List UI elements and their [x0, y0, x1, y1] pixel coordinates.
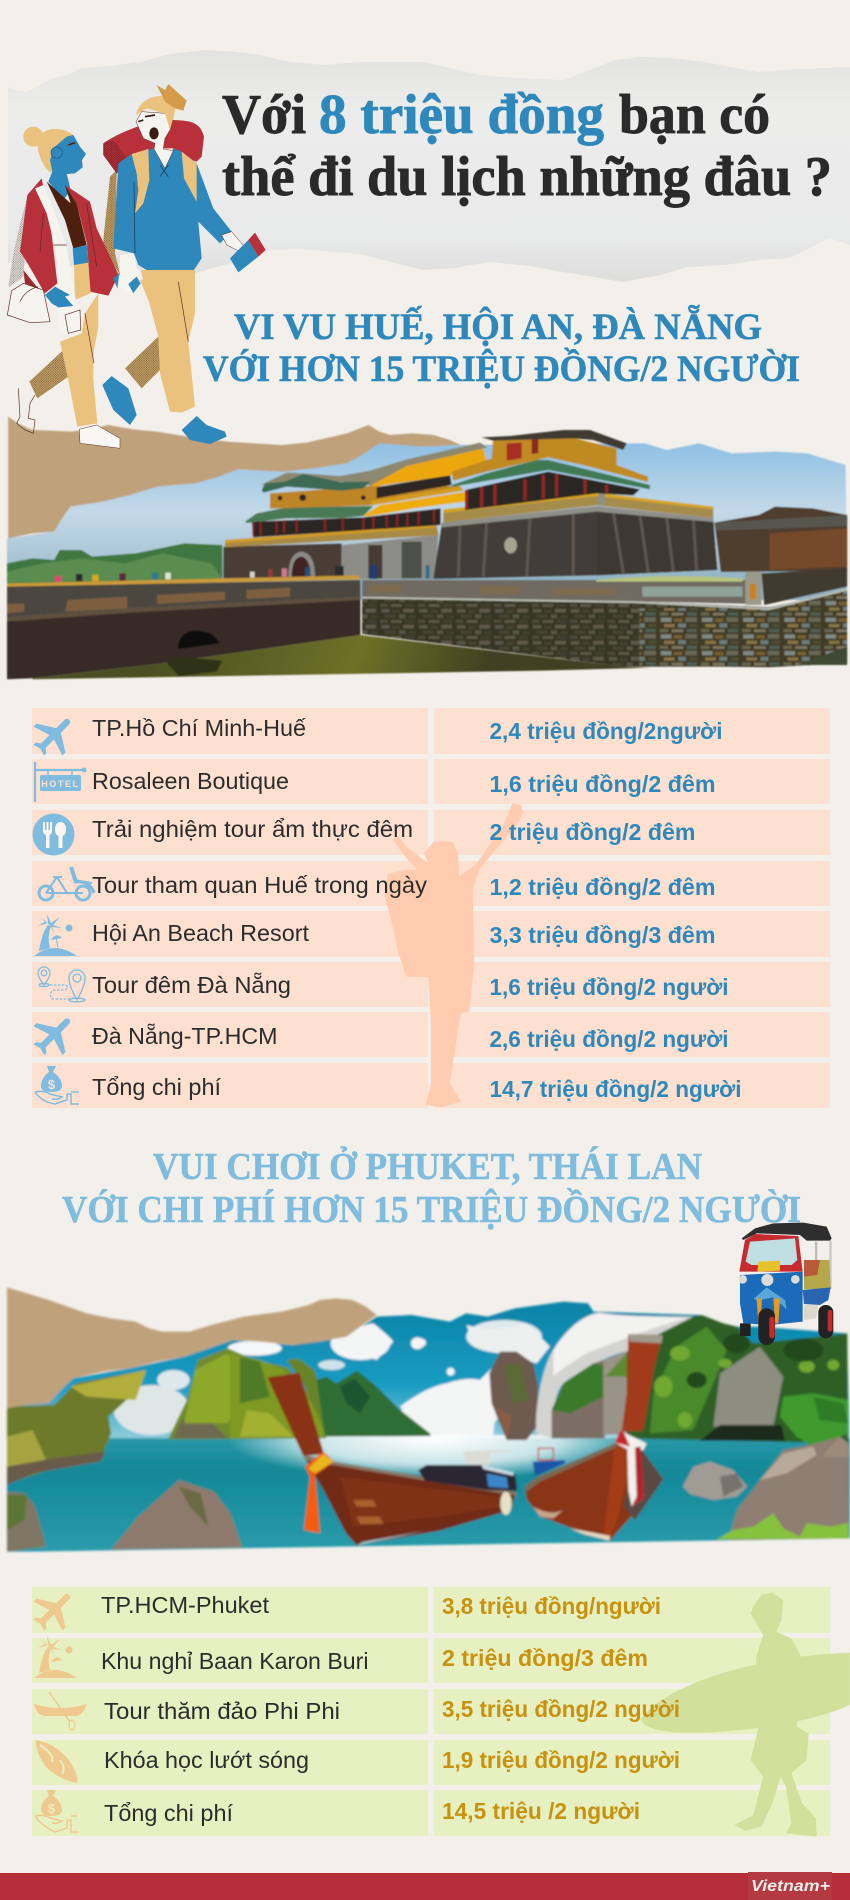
illustration: tuk-tuk [738, 1223, 833, 1345]
left longtail boat [267, 1373, 517, 1545]
row: Ho Chi Minh - Hue [92, 715, 722, 744]
icon: plane [24, 1005, 84, 1064]
title: Với [222, 84, 306, 146]
lower bodies [7, 270, 227, 448]
row: night food tour: 2 triệu đồng/2 đêm [490, 819, 696, 845]
icon: palm island [34, 1636, 77, 1678]
photo: Hue citadel with torn paper [7, 417, 847, 679]
silhouette: hiker with raised arms [385, 803, 523, 1107]
row: Rosaleen Boutique: 1,6 triệu đồng/2 đêm [490, 771, 716, 797]
sub-photo: citadel gate in true scale [223, 430, 717, 579]
icon: money bag in hand: $ [48, 1077, 56, 1092]
icon: money bag in hand [35, 1066, 79, 1104]
logo: Vietnam+: Vietnam+ [751, 1878, 830, 1895]
icon: money bag in hand: $ [48, 1801, 56, 1816]
row: Hoi An Beach Resort [92, 920, 716, 948]
illustration: two travellers [7, 84, 266, 448]
row: Hue day tour [92, 872, 716, 900]
title: 8 triệu đồng [319, 84, 604, 146]
row: total cost: 14,5 triệu /2 người [442, 1798, 640, 1824]
row: Hue day tour: 1,2 triệu đồng/2 đêm [490, 874, 716, 900]
row: HCMC - Phuket: TP.HCM-Phuket [101, 1592, 270, 1618]
row: Da Nang night tour [92, 971, 728, 1000]
row: Phi Phi tour: 3,5 triệu đồng/2 người [442, 1696, 680, 1722]
photo: Phuket bay with longtail boats [7, 1287, 850, 1552]
row: Ho Chi Minh - Hue: TP.Hồ Chí Minh-Huế [92, 715, 306, 741]
row: Da Nang night tour: Tour đêm Đà Nẵng [92, 971, 291, 998]
row: Da Nang - HCMC: Đà Nẵng-TP.HCM [92, 1022, 278, 1049]
row: Rosaleen Boutique: Rosaleen Boutique [92, 768, 289, 794]
row: total cost [92, 1074, 742, 1102]
icon: canoe and paddle [34, 1692, 87, 1730]
title: thể đi du lịch những đâu ? [222, 146, 832, 208]
row: Hue day tour: Tour tham quan Huế trong ngày [92, 872, 428, 898]
row: Baan Karon Buri: 2 triệu đồng/3 đêm [442, 1645, 648, 1671]
icon: food [32, 814, 74, 856]
icon: plane [24, 705, 84, 765]
sub-photo: cliffs, right boat and rocks [525, 1313, 848, 1541]
heading: Phuket section: VỚI CHI PHÍ HƠN 15 TRIỆU ĐỒNG/2 NGƯỜI [62, 1187, 801, 1231]
upper bodies [8, 84, 266, 300]
row: Phi Phi tour: Tour thăm đảo Phi Phi [104, 1698, 340, 1724]
heading: Phuket section: VUI CHƠI Ở PHUKET, THÁI LAN [153, 1146, 702, 1188]
row: Ho Chi Minh - Hue: 2,4 triệu đồng/2người [490, 718, 722, 744]
row: Rosaleen Boutique [92, 768, 716, 797]
row: HCMC - Phuket: 3,8 triệu đồng/người [442, 1593, 661, 1619]
row: Da Nang - HCMC: 2,6 triệu đồng/2 người [490, 1026, 728, 1052]
row: Da Nang night tour: 1,6 triệu đồng/2 người [490, 974, 728, 1000]
icon: plane [24, 1580, 84, 1640]
icon: surfboard [36, 1740, 77, 1783]
small blue boat [533, 1460, 565, 1476]
row: surf course: Khóa học lướt sóng [104, 1747, 309, 1773]
row: surf course: 1,9 triệu đồng/2 người [442, 1747, 680, 1773]
icon: hotel sign: HOTEL [41, 779, 80, 789]
row: total cost: 14,7 triệu đồng/2 người [490, 1076, 742, 1102]
icon: palm island [34, 914, 77, 956]
row: Hoi An Beach Resort: Hội An Beach Resort [92, 920, 310, 946]
row: total cost: Tổng chi phí [104, 1800, 234, 1826]
row: night food tour: Trải nghiệm tour ẩm thực đêm [92, 816, 413, 842]
heading: Hue section: VỚI HƠN 15 TRIỆU ĐỒNG/2 NGƯỜI [203, 346, 800, 390]
row: night food tour [92, 816, 696, 845]
footer bar [0, 1872, 850, 1900]
icon: hotel sign [35, 762, 86, 802]
row: Baan Karon Buri: Khu nghỉ Baan Karon Buri [101, 1648, 368, 1674]
row: Baan Karon Buri [101, 1645, 648, 1674]
panel: Hue cost table [32, 708, 830, 1108]
sub-photo: island centre and left boat [230, 1323, 565, 1545]
row: surf course [104, 1747, 680, 1773]
torn grey paper band [8, 50, 850, 282]
row backgrounds [32, 708, 830, 1108]
row: Phi Phi tour [104, 1696, 680, 1724]
row: total cost: Tổng chi phí [92, 1074, 222, 1100]
icon: map pins [38, 967, 85, 1002]
icon: cyclo [39, 867, 94, 900]
row backgrounds [32, 1587, 830, 1836]
row: HCMC - Phuket [101, 1592, 661, 1619]
heading: Hue section: VI VU HUẾ, HỘI AN, ĐÀ NẴNG [234, 304, 762, 348]
row: total cost [104, 1798, 640, 1826]
title: bạn có [619, 84, 770, 146]
row: Da Nang - HCMC [92, 1022, 728, 1052]
silhouette: surfer with surfboard [641, 1593, 850, 1837]
right longtail boat [525, 1334, 663, 1541]
row: Hoi An Beach Resort: 3,3 triệu đồng/3 đêm [490, 922, 716, 948]
panel: Phuket cost table [32, 1587, 850, 1837]
icon: money bag in hand [35, 1790, 79, 1832]
